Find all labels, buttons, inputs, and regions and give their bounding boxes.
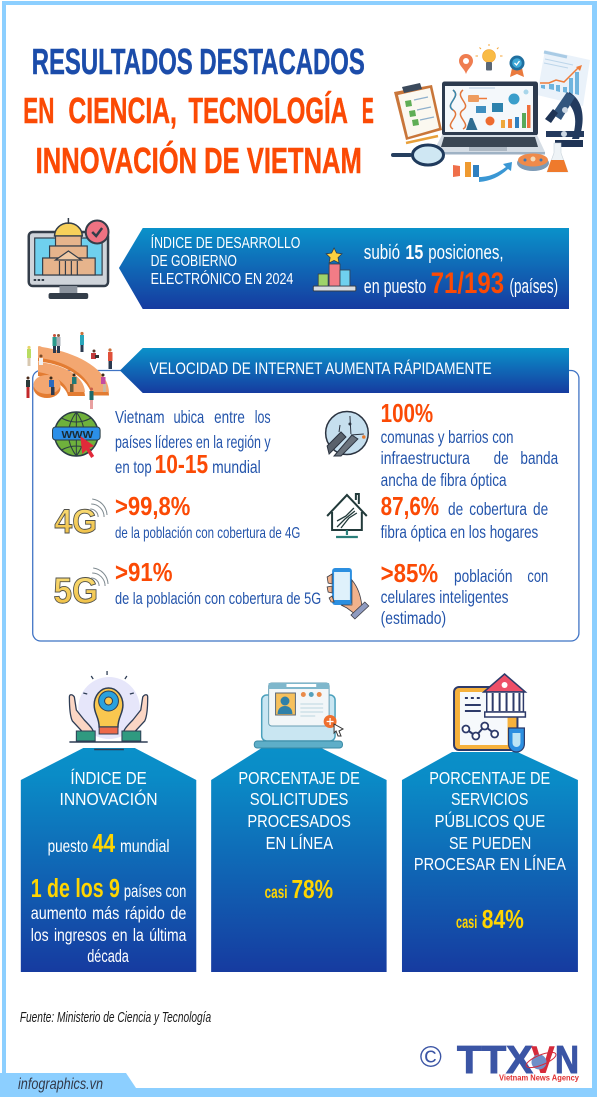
- icon: fibre cable: [326, 412, 368, 456]
- stat: 5G coverage: >91%: [115, 559, 172, 587]
- stat: global ranking: Vietnam: [115, 407, 165, 427]
- panel: innovation index: mundial: [120, 836, 170, 856]
- banner: internet speed: [120, 348, 569, 393]
- panel: innovation index: aumento más rápido de: [31, 903, 186, 923]
- rank text: [364, 242, 558, 300]
- stat: smartphones: >85%: [381, 560, 438, 588]
- source note: Fuente: Ministerio de Ciencia y Tecnología: [20, 1009, 211, 1026]
- stat: fibre in households: 87,6%: [381, 493, 439, 521]
- stat: global ranking: ubica: [173, 407, 204, 427]
- panel: online public services: PÚBLICOS QUE: [435, 810, 545, 831]
- banner label: DE GOBIERNO: [151, 253, 237, 270]
- icon: hands with light bulb: [69, 671, 148, 750]
- icon: house with fibre: [327, 494, 367, 537]
- stat: global ranking: [53, 407, 271, 479]
- people on the wifi symbol: [26, 332, 112, 409]
- panel: innovation index: INNOVACIÓN: [59, 788, 158, 809]
- panel: online applications: EN LÍNEA: [266, 833, 333, 853]
- panel: innovation index: los ingresos en la última: [31, 925, 186, 945]
- stat: fibre in communes: de: [494, 448, 509, 468]
- icon: laptop with online form: [254, 683, 343, 748]
- rank text: (países): [510, 276, 558, 298]
- clipboard: [394, 85, 442, 140]
- footer tab: [0, 1073, 136, 1097]
- icon: 4G: 4G: [55, 503, 97, 541]
- stat: fibre in communes: comunas y barrios con: [381, 427, 513, 447]
- logo: TTXVN: N: [555, 1039, 579, 1082]
- stat: fibre in households: [327, 493, 548, 542]
- stat: global ranking: entre: [214, 407, 245, 427]
- stat: fibre in communes: 100%: [381, 400, 433, 428]
- panel: online applications: [211, 748, 387, 972]
- panel: online applications: PROCESADOS: [247, 811, 351, 831]
- logo: TTXVN: [420, 1039, 579, 1082]
- panel: online public services: SERVICIOS: [451, 789, 528, 809]
- panel: innovation index: ÍNDICE DE: [70, 768, 147, 788]
- magnifier: [393, 153, 410, 157]
- laptop: [442, 82, 538, 136]
- stat: 4G coverage: [55, 493, 300, 542]
- stat: fibre in communes: [326, 400, 558, 490]
- banner: e-government index: [119, 228, 569, 309]
- text: E: [362, 91, 374, 131]
- panel: innovation index: 44: [92, 830, 115, 858]
- panel: online public services: SE PUEDEN: [449, 833, 531, 853]
- stat: fibre in communes: banda: [520, 448, 558, 468]
- logo: TTXVN: V: [531, 1039, 555, 1082]
- title: INNOVACIÓN DE VIETNAM: [36, 141, 362, 181]
- bars and arrow: [453, 165, 460, 177]
- panel: innovation index: 1 de los 9: [31, 875, 120, 903]
- rank text: 71/193: [431, 267, 504, 300]
- stat: 4G coverage: de la población con cobertura de 4G: [115, 525, 300, 542]
- banner label: ELECTRÓNICO EN 2024: [151, 269, 294, 288]
- panel: online applications: PORCENTAJE DE: [238, 768, 360, 788]
- panel: innovation index: década: [87, 946, 129, 966]
- icon: wifi with people: [26, 332, 112, 409]
- title: TECNOLOGÍA: [188, 91, 348, 131]
- stat: fibre in households: fibra óptica en los hogares: [381, 522, 538, 542]
- rank text: posiciones,: [428, 242, 504, 264]
- icon: hand holding phone: [327, 568, 369, 619]
- panel: innovation index: puesto: [48, 836, 88, 856]
- stat: global ranking: en top: [115, 457, 152, 477]
- stat: global ranking: países líderes en la región y: [115, 432, 271, 452]
- panel: internet speed: [33, 370, 579, 641]
- rank text: 15: [405, 242, 423, 264]
- banner label: ÍNDICE DE DESARROLLO: [151, 233, 300, 252]
- panel: online applications: SOLICITUDES: [250, 789, 348, 809]
- stat: smartphones: con: [527, 566, 548, 586]
- panel: innovation index: [21, 748, 196, 972]
- icon: science and technology illustration: [393, 44, 590, 182]
- stat: 4G coverage: >99,8%: [115, 493, 190, 521]
- panel: online public services: casi: [456, 912, 477, 932]
- rank text: en puesto: [364, 276, 426, 298]
- icon: document with public building: [454, 674, 525, 752]
- stat: fibre in communes: ancha de fibra óptica: [381, 470, 507, 490]
- microscope: [546, 131, 584, 137]
- panel: online public services: PORCENTAJE DE: [429, 768, 550, 788]
- banner label: [151, 233, 300, 288]
- panel: online public services: 84%: [482, 906, 524, 934]
- icon: government building on monitor: [29, 218, 109, 299]
- logo: TTXVN: TTX: [457, 1039, 533, 1082]
- stat: smartphones: población: [454, 566, 513, 586]
- panel: online public services: [402, 752, 578, 972]
- title: RESULTADOS DESTACADOS: [32, 42, 365, 82]
- pin, bulb and badge: [459, 54, 473, 74]
- logo: TTXVN: Vietnam News Agency: [499, 1072, 579, 1082]
- rank text: subió: [364, 242, 400, 264]
- stat: smartphones: (estimado): [381, 608, 446, 628]
- stat: global ranking: mundial: [212, 457, 261, 477]
- panel: online applications: casi: [265, 882, 287, 902]
- panel: innovation index: países con: [124, 881, 186, 901]
- banner: internet speed: VELOCIDAD DE INTERNET AUMENTA RÁPIDAMENTE: [150, 359, 492, 378]
- icon: www globe: WWW: [61, 430, 94, 441]
- panel: online public services: PROCESAR EN LÍNEA: [414, 854, 566, 874]
- logo: TTXVN: ©: [420, 1041, 442, 1074]
- stat: global ranking: 10-15: [155, 451, 208, 479]
- stat: fibre in households: de cobertura de: [448, 499, 548, 519]
- stat: 5G coverage: [54, 559, 321, 611]
- stat: smartphones: [327, 560, 548, 628]
- icon: 5G: 5G: [54, 571, 98, 611]
- panel: online applications: 78%: [291, 876, 333, 904]
- footer tab: infographics.vn: [18, 1076, 103, 1093]
- petri dish and flask: [517, 155, 549, 171]
- title: CIENCIA,: [68, 91, 177, 131]
- stat: 5G coverage: de la población con cobertura de 5G: [115, 589, 321, 608]
- title: EN: [23, 91, 55, 131]
- chart paper: [537, 50, 590, 106]
- stat: global ranking: los: [255, 407, 271, 427]
- stat: fibre in communes: infraestructura: [381, 448, 470, 468]
- icon: www globe: [53, 412, 100, 458]
- stat: smartphones: celulares inteligentes: [381, 587, 509, 607]
- icon: ranking podium: [313, 248, 356, 291]
- title: [23, 42, 374, 181]
